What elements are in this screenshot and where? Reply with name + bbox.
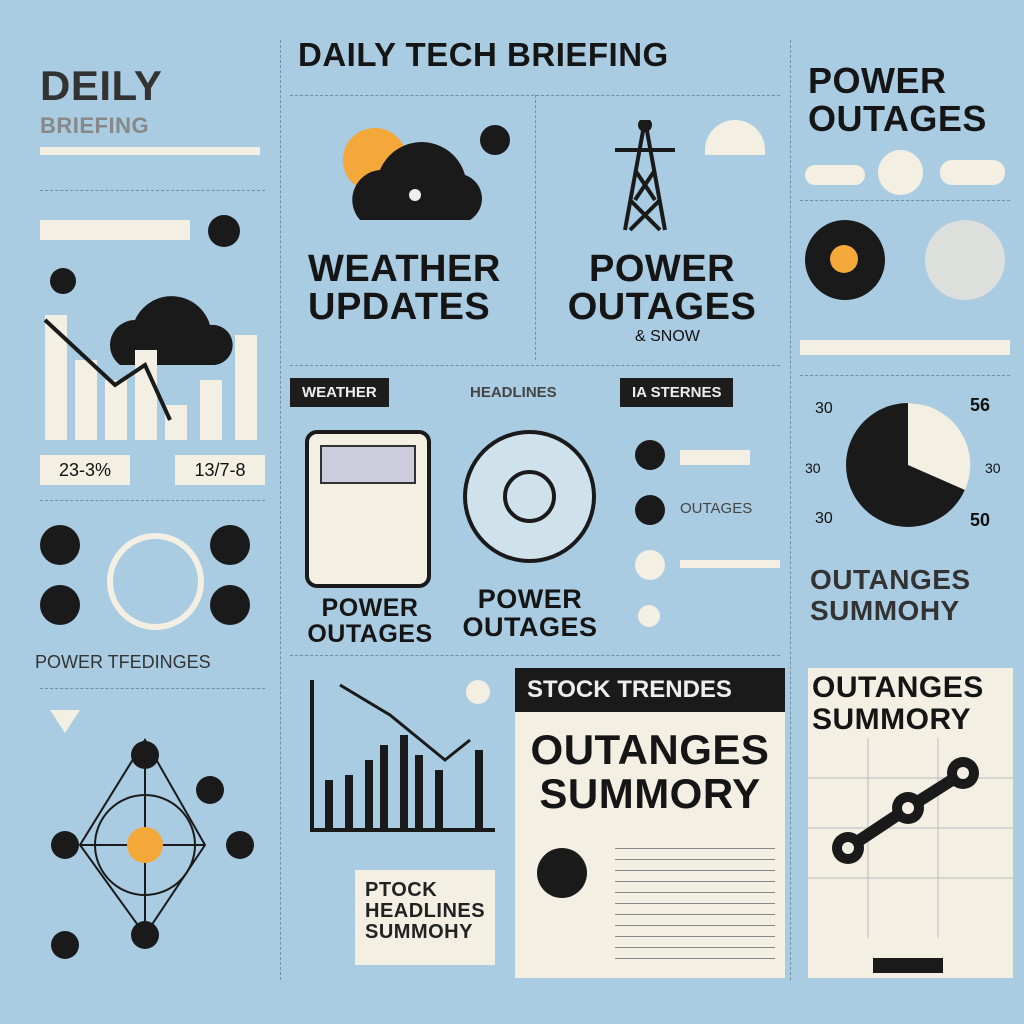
stock headlines: HEADLINES [365,900,485,922]
panel: stock trends [515,668,785,978]
panel: weather updates: UPDATES [308,286,490,328]
pie panel: 30 [815,400,833,417]
left header: BRIEFING [40,113,149,138]
pie panel: 30 [815,510,833,527]
panel: stock trends: SUMMORY [539,770,761,817]
tags row [290,378,733,407]
stock headlines [355,870,495,965]
panel: outanges summory: SUMMORY [812,702,971,736]
left chart panel: 13/7-8 [194,460,246,480]
left chart panel [40,215,265,485]
panel: power outages tower [568,120,765,345]
panel: dial: OUTAGES [462,612,598,642]
tags row: IA STERNES [632,384,721,401]
panel: power outages tower: & SNOW [635,328,700,345]
right header [808,60,987,139]
tags row: WEATHER [302,384,377,401]
network diagram [50,710,254,959]
left icons panel: POWER TFEDINGES [35,652,211,672]
stock headlines: PTOCK [365,879,437,901]
tags row: HEADLINES [470,384,557,401]
panel: device [305,430,433,648]
pie panel: SUMMOHY [810,595,960,626]
left header: DEILY [40,62,162,109]
pie panel: 50 [970,510,990,530]
right header: OUTAGES [808,98,987,139]
panel: dial [462,430,598,642]
left chart panel: 23-3% [59,460,111,480]
left header [40,62,260,155]
list panel: OUTAGES [680,500,752,517]
stock headlines: SUMMOHY [365,921,473,943]
bar chart [310,680,495,832]
right header: POWER [808,60,947,101]
pie panel: 30 [805,460,821,476]
icon: sun cloud [343,128,482,220]
panel: weather updates: WEATHER [308,248,501,290]
panel: power outages tower: OUTAGES [568,286,756,328]
right icons panel [800,150,1010,355]
title: DAILY TECH BRIEFING [298,36,669,73]
panel: stock trends: STOCK TRENDES [527,676,732,703]
pie panel: 30 [985,460,1001,476]
panel: power outages tower: POWER [589,248,735,290]
list panel [635,440,780,627]
panel: outanges summory [808,668,1013,978]
pie panel [805,395,1001,626]
left icons panel [35,525,250,672]
pie panel: 56 [970,395,990,415]
panel: device: POWER [322,594,418,622]
panel: device: OUTAGES [307,620,433,648]
panel: weather updates [308,125,510,328]
pie panel: OUTANGES [810,564,971,595]
panel: stock trends: OUTANGES [531,726,769,773]
panel: outanges summory: OUTANGES [812,671,984,704]
panel: dial: POWER [478,584,582,614]
